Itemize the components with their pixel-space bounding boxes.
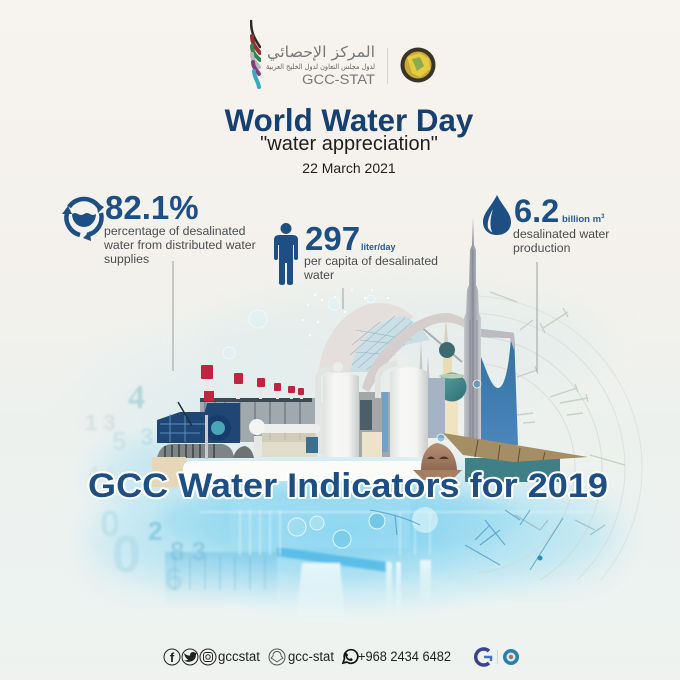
watermark numbers: 1 3	[85, 410, 116, 435]
watermark numbers: 2	[148, 516, 162, 546]
thin pointer line: 82.1%	[172, 261, 174, 371]
power plant structure	[157, 398, 315, 443]
icon: snapchat	[269, 649, 285, 665]
description: water	[303, 268, 334, 282]
watermark numbers: 0	[112, 526, 141, 584]
icon: water drop	[483, 195, 511, 235]
white arch	[362, 313, 465, 392]
watermark numbers	[85, 379, 206, 597]
red chimney stacks	[201, 365, 304, 401]
icon: instagram	[200, 649, 216, 665]
icon: water cycle	[62, 199, 104, 241]
icon: whatsapp	[343, 650, 358, 663]
date: 22 March 2021	[302, 160, 396, 176]
stat: 82.1%	[62, 189, 256, 266]
sparkle dots near dome	[302, 289, 389, 336]
Burj Khalifa tower	[464, 217, 481, 445]
bubbles in water	[288, 507, 542, 560]
description: percentage of desalinated	[104, 224, 246, 238]
value: 6.2	[514, 193, 559, 229]
handle: gcc-stat: gcc-stat	[288, 649, 334, 664]
icon: twitter	[182, 649, 198, 665]
white pipework	[249, 419, 320, 458]
main banner heading: GCC Water Indicators for 2019	[88, 467, 608, 505]
white platform	[152, 457, 422, 487]
watermark numbers: 5	[112, 426, 126, 456]
logo: G mark	[476, 649, 491, 665]
icon: facebook: f	[170, 650, 175, 665]
thin pointer line: 6.2	[536, 262, 538, 372]
mosque dome	[413, 443, 462, 480]
desalination tanks	[314, 356, 428, 457]
thin spires	[419, 340, 430, 385]
teal building under roof	[465, 458, 560, 482]
description: per capita of desalinated	[304, 254, 438, 268]
subtitle: "water appreciation"	[260, 133, 438, 155]
description: supplies	[104, 252, 149, 266]
handle: gccstat: gccstat	[218, 649, 260, 664]
watermark numbers: 6	[165, 561, 183, 597]
logo ribbon	[251, 21, 260, 87]
equipment between tanks	[358, 378, 445, 457]
watermark numbers: 8 3	[170, 536, 206, 566]
lower building reflection	[165, 500, 600, 622]
golden roof canopy	[443, 433, 588, 462]
footer contacts	[164, 649, 519, 665]
watermark numbers: 0	[100, 503, 120, 544]
stat: 6.2 billion m3	[483, 193, 609, 255]
Kingdom Centre frame	[481, 329, 514, 350]
thin pointer line: 297	[342, 288, 344, 309]
stat: 297 liter/day	[274, 220, 438, 285]
Kingdom Centre tower	[481, 329, 518, 445]
floating bubbles	[223, 295, 481, 442]
unit: liter/day	[361, 242, 396, 252]
watermark numbers: 4	[128, 379, 145, 416]
GCC emblem	[400, 48, 436, 82]
unit: 3	[601, 214, 605, 220]
title: World Water Day	[225, 103, 474, 138]
value: 297	[305, 220, 360, 257]
icon: facebook	[164, 649, 180, 665]
engineering gauge arcs	[478, 292, 642, 580]
desalination dome building	[319, 303, 462, 372]
Kuwait Towers	[438, 318, 466, 440]
Arabic subtitle: لدول مجلس التعاون لدول الخليج العربية	[266, 62, 375, 71]
value: 82.1%	[105, 189, 199, 226]
description: desalinated water	[513, 227, 609, 241]
watermark numbers: 3	[140, 424, 153, 451]
phone number: +968 2434 6482	[358, 649, 451, 664]
logo: round badge	[503, 649, 519, 665]
logo: GCC-STAT	[251, 21, 375, 87]
description: production	[513, 241, 571, 255]
GCC-STAT wordmark: GCC-STAT	[302, 72, 375, 87]
blue gauge marks on water	[370, 510, 605, 570]
logo divider	[386, 48, 388, 84]
description: water from distributed water	[103, 238, 256, 252]
unit: billion m	[562, 214, 601, 225]
turbine housings	[157, 415, 254, 459]
Arabic name: المركز الإحصائي	[267, 43, 375, 62]
footer logo divider	[496, 650, 498, 664]
icon: person	[274, 223, 298, 285]
watermark numbers: 4 1	[88, 463, 116, 485]
